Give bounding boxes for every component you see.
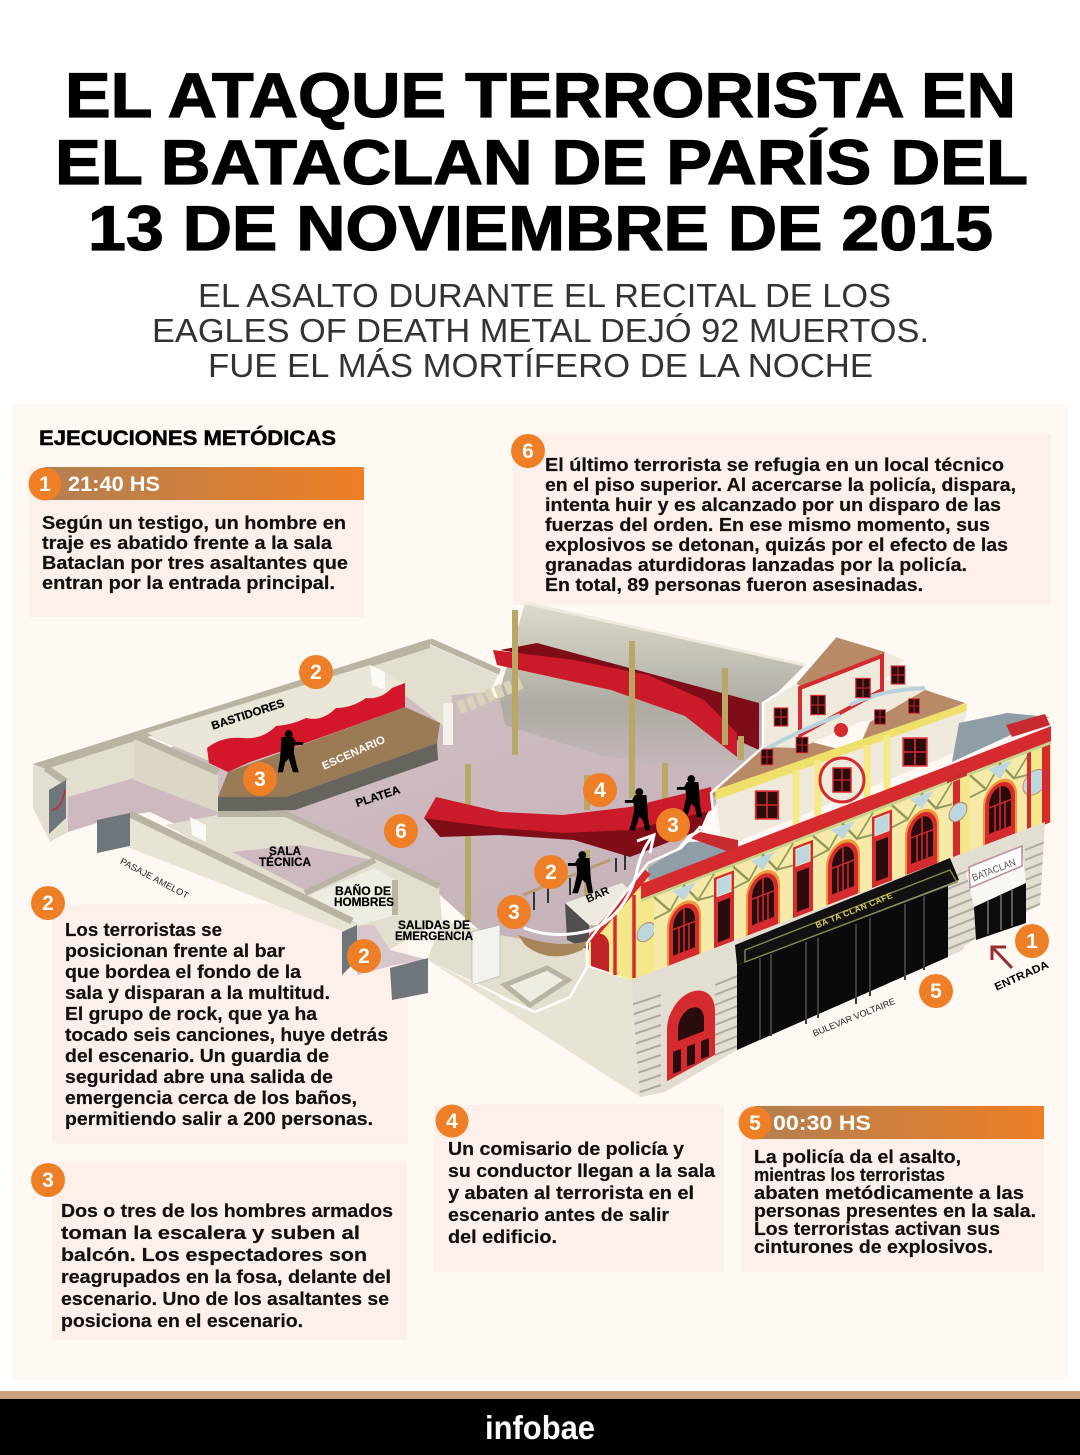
text: step 4 [436,1104,716,1247]
panel: step 1: Bataclan por tres asaltantes que [42,553,348,573]
diagram labels: BULEVAR VOLTAIRE [811,996,897,1038]
subtitle: EL ASALTO DURANTE EL RECITAL DE LOS [198,277,891,314]
text: step 2: permitiendo salir a 200 personas. [65,1109,373,1129]
entrance: BATACLAN [971,857,1018,884]
text: step 4: su conductor llegan a la sala [448,1161,716,1181]
entrance [966,846,1026,940]
upper floor facade [637,726,1051,982]
text: step 2: sala y disparan a la multitud. [65,983,330,1003]
title [55,61,1028,264]
numbered markers: 4 [594,779,606,802]
ground floor [631,822,1045,1097]
curtain [207,683,405,772]
stairs [459,682,522,708]
arrowhead: white route [637,835,654,853]
numbered markers: 2 [42,892,54,915]
panel: step 4 background [434,1105,724,1272]
numbered markers: 2 [310,661,322,684]
panel: step 6: El último terrorista se refugia en un local técnico [545,455,1004,475]
numbered markers: 6 [395,820,407,843]
text: step 5: personas presentes en la sala. [754,1201,1036,1221]
subtitle: FUE EL MÁS MORTÍFERO DE LA NOCHE [208,347,873,384]
title: EL ATAQUE TERRORISTA EN [65,61,1016,131]
text: step 2: seguridad abre una salida de [65,1067,333,1087]
text: step 5: La policía da el asalto, [754,1147,961,1167]
floor [68,662,740,958]
text: step 3: toman la escalera y suben al [61,1223,360,1243]
panel: step 1: 1 [39,473,51,496]
text: step 5: cinturones de explosivos. [754,1237,993,1257]
text: step 4: del edificio. [448,1227,557,1247]
numbered markers: 1 [1026,930,1038,953]
text: step 4: 4 [446,1110,458,1133]
text: step 4: escenario antes de salir [448,1205,669,1225]
diagram labels: PLATEA [354,784,402,810]
text: step 2: posicionan frente al bar [65,941,285,961]
stairs to balcony [518,935,590,956]
text: step 3 [31,1163,393,1331]
illustration: Bataclan cutaway [33,603,1051,1097]
subtitle [152,277,929,384]
emergency area [428,920,590,1012]
stage [218,707,440,797]
panel: step 3 background [52,1162,407,1340]
panel: step 5 background [741,1105,1044,1272]
panel: step 6: En total, 89 personas fueron asesinadas. [545,575,923,595]
base wedge [428,960,640,1097]
panel: step 1: 21:40 HS [68,473,160,496]
diagram labels: PASAJE AMELOT [119,856,191,901]
diagram labels: BASTIDORES [210,698,286,733]
side roofs [648,840,737,888]
text: step 5: abaten metódicamente a las [754,1183,1024,1203]
numbered markers: 3 [254,768,266,791]
numbered markers: 2 [545,861,557,884]
gunmen [568,775,702,893]
text: step 3: escenario. Uno de los asaltantes se [61,1289,389,1309]
footer band: infobae [485,1409,595,1446]
diagram labels: SALIDAS DE [398,920,470,932]
panel: step 6: intenta huir y es alcanzado por un disparo de las [545,495,1001,515]
numbered markers: 2 [358,945,370,968]
panel: step 6: 6 [522,440,534,463]
background panel [12,404,1068,1380]
text: step 3: balcón. Los espectadores son [61,1245,367,1265]
rustication left [631,975,740,1095]
title: EL BATACLAN DE PARÍS DEL [55,128,1028,198]
subtitle: EAGLES OF DEATH METAL DEJÓ 92 MUERTOS. [152,312,929,349]
text: step 2: El grupo de rock, que ya ha [65,1004,318,1024]
diagram labels: EMERGENCIA [395,931,473,943]
numbered markers: 3 [508,901,520,924]
diagram labels: ENTRADA [993,959,1051,994]
diagram labels: BAÑO DE [335,885,391,898]
panel: step 2 background [52,905,408,1143]
diagram labels: TÉCNICA [259,856,311,869]
panel: step 1: Según un testigo, un hombre en [42,513,346,533]
gable: roofs and upper wall [711,637,967,848]
diagram labels: ESCENARIO [320,734,388,773]
gunman on stage [278,730,303,772]
rustication right [945,842,1045,950]
panel: step 6: fuerzas del orden. En ese mismo momento, sus [545,515,990,535]
lower wing walls [165,815,442,955]
bar [523,855,633,950]
auditorium back wall [497,603,805,790]
title: 13 DE NOVIEMBRE DE 2015 [88,194,993,264]
text: step 5: 00:30 HS [773,1112,871,1135]
text: step 4: Un comisario de policía y [448,1139,684,1159]
text: step 5 [738,1106,1044,1257]
footer band [0,1391,1080,1455]
text: step 4: y abaten al terrorista en el [448,1183,694,1203]
panel: step 6: explosivos se detonan, quizás por el efecto de las [545,535,1008,555]
panel: step 6: en el piso superior. Al acercarse la policía, dispara, [545,475,1016,495]
text: step 2: tocado seis canciones, huye detrás [65,1025,388,1045]
text: step 3: 3 [42,1169,54,1192]
numbered markers: 3 [667,814,679,837]
front balcony [424,787,713,857]
text: step 2: del escenario. Un guardia de [65,1046,329,1066]
text: step 3: Dos o tres de los hombres armados [61,1201,393,1221]
diagram labels: HOMBRES [334,897,394,909]
panel: step 1: traje es abatido frente a la sala [42,533,333,553]
arrow: entrada [992,947,1012,968]
text: step 5: mientras los terroristas [754,1165,945,1185]
text: step 2: Los terroristas se [65,920,222,940]
text: step 3: reagrupados en la fosa, delante del [61,1267,391,1287]
panel: step 6 [511,434,1051,605]
text: step 5: 5 [749,1112,761,1135]
heading: ejecuciones: EJECUCIONES METÓDICAS [39,426,336,450]
panel: step 1 [28,467,364,617]
storefront [735,858,959,1050]
white outline [500,637,835,1012]
text: step 3: posiciona en el escenario. [61,1311,303,1331]
storefront: BA TA CLAN CAFE [814,890,894,930]
red door [667,983,715,1081]
panel: step 1: entran por la entrada principal. [42,573,335,593]
panel: step 6: granadas aturdidoras lanzadas por la policía. [545,555,967,575]
numbered markers [31,655,1049,1008]
rear balcony [493,643,759,757]
text: step 2: emergencia cerca de los baños, [65,1088,357,1108]
left side of upper floor [589,868,648,982]
diagram labels: BAR [584,885,611,906]
gold columns [468,610,741,930]
arrow: white route [524,837,652,935]
text: step 5: Los terroristas activan sus [754,1219,1000,1239]
doors [49,780,66,834]
text: step 2 [65,920,388,1129]
diagram labels: SALA [269,846,301,858]
numbered markers: 5 [930,980,942,1003]
text: step 2: que bordea el fondo de la [65,962,302,982]
backstage walls [33,639,430,842]
diagram labels [119,698,1051,1038]
